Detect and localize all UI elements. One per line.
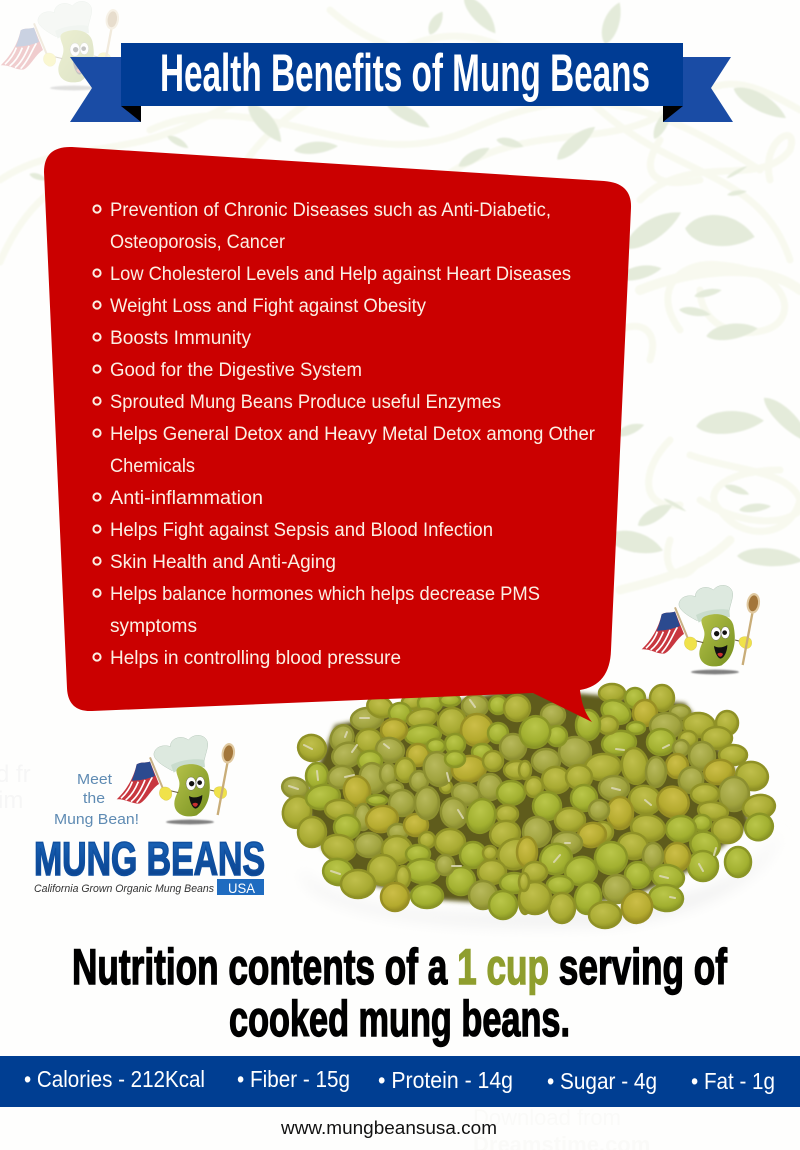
benefit list text: Boosts Immunity bbox=[110, 328, 251, 349]
mascot: bean chef, right bbox=[642, 585, 761, 674]
protein: • Protein - 14g bbox=[378, 1067, 513, 1093]
faded mascot watermark bbox=[1, 1, 120, 90]
website url: www.mungbeansusa.com bbox=[280, 1117, 497, 1138]
Meet the Mung Bean tagline: Meet bbox=[77, 772, 112, 788]
benefit list text: Low Cholesterol Levels and Help against Heart Diseases bbox=[110, 264, 571, 285]
nutrition heading: Nutrition contents of a 1 cup serving of bbox=[72, 939, 727, 995]
benefit list text: symptoms bbox=[110, 616, 197, 637]
benefit list text: Helps Fight against Sepsis and Blood Infection bbox=[110, 520, 493, 541]
faint ghost watermark text, left bbox=[0, 761, 31, 814]
benefit list text: Helps General Detox and Heavy Metal Detox among Other bbox=[110, 424, 596, 445]
ribbon left fold bbox=[121, 106, 141, 122]
logo strapline: California Grown Organic Mung Beans bbox=[34, 883, 214, 895]
fat: • Fat - 1g bbox=[691, 1068, 775, 1094]
background: faded sprout pattern bbox=[0, 0, 800, 590]
USA badge bbox=[217, 879, 264, 896]
red speech bubble bbox=[44, 147, 631, 722]
nutrition facts bar bbox=[0, 1056, 800, 1107]
title ribbon banner bbox=[70, 43, 733, 122]
Meet the Mung Bean tagline: the bbox=[83, 791, 105, 807]
faint ghost watermark text, bottom: Download from bbox=[473, 1105, 621, 1130]
benefit list text: Helps in controlling blood pressure bbox=[110, 648, 401, 669]
benefit list text: Prevention of Chronic Diseases such as Anti-Diabetic, bbox=[110, 200, 551, 221]
ribbon right fold bbox=[663, 106, 683, 122]
benefit list text: Helps balance hormones which helps decrease PMS bbox=[110, 584, 540, 605]
Meet the Mung Bean tagline bbox=[54, 772, 139, 828]
benefit list text bbox=[110, 200, 596, 669]
Meet the Mung Bean tagline: Mung Bean! bbox=[54, 812, 139, 828]
benefit bullets bbox=[93, 205, 101, 661]
mascot: bean chef, logo bbox=[117, 735, 236, 824]
logo: Mung Beans USA bbox=[34, 735, 265, 896]
benefit list text: Anti-inflammation bbox=[110, 488, 263, 509]
callout panel: health benefits list bbox=[44, 147, 631, 722]
benefit list text: Osteoporosis, Cancer bbox=[110, 232, 286, 253]
logo wordmark: MUNG BEANS bbox=[34, 832, 265, 885]
sugar: • Sugar - 4g bbox=[547, 1068, 657, 1094]
ribbon left tail bbox=[70, 57, 141, 122]
fiber: • Fiber - 15g bbox=[237, 1066, 350, 1092]
calories: • Calories - 212Kcal bbox=[24, 1066, 205, 1092]
ribbon right tail bbox=[663, 57, 733, 122]
bean pile photo bbox=[279, 684, 780, 928]
ribbon main band bbox=[121, 43, 683, 106]
benefit list text: Sprouted Mung Beans Produce useful Enzymes bbox=[110, 392, 501, 413]
faint ghost watermark text, bottom bbox=[473, 1105, 650, 1150]
benefit list text: Weight Loss and Fight against Obesity bbox=[110, 296, 426, 317]
nutrition heading: cooked mung beans. bbox=[229, 991, 570, 1047]
benefit list text: Chemicals bbox=[110, 456, 195, 477]
nutrition heading bbox=[72, 939, 727, 1047]
USA badge: USA bbox=[228, 880, 256, 896]
benefit list text: Good for the Digestive System bbox=[110, 360, 362, 381]
benefit list text: Skin Health and Anti-Aging bbox=[110, 552, 336, 573]
